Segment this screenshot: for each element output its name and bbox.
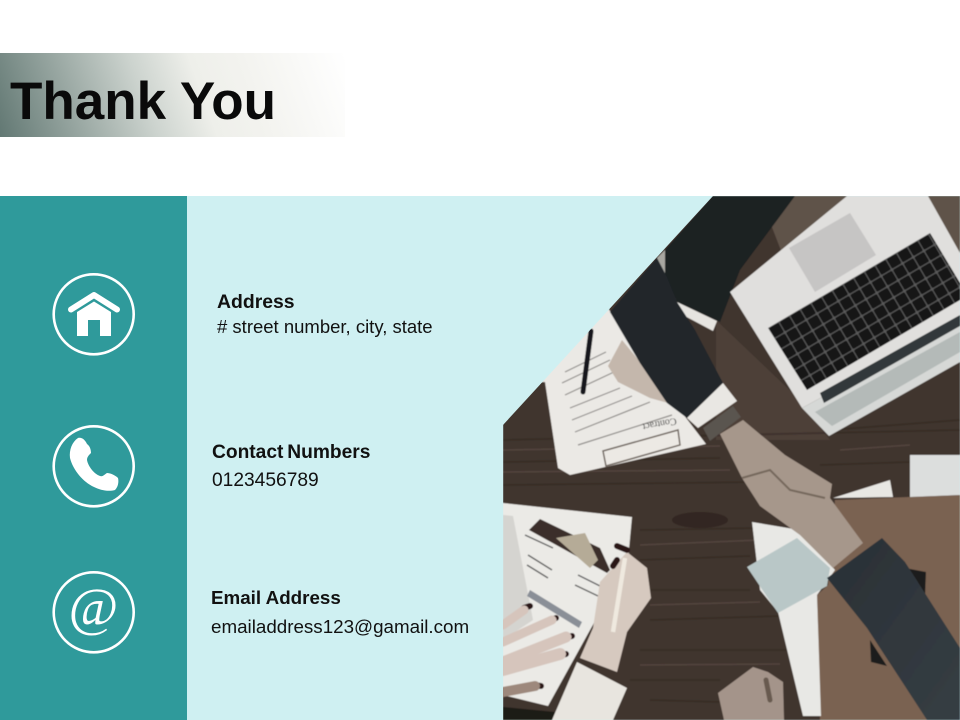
email value: emailaddress123@gamail.com (211, 616, 469, 637)
trackpad (789, 213, 876, 292)
writing hand (580, 552, 651, 672)
keyboard (768, 232, 960, 390)
grey note (747, 538, 830, 613)
grey shirt strip between sleeves (656, 250, 666, 274)
white blouse sleeve (552, 662, 627, 720)
pen (583, 331, 591, 392)
photo: business handshake over desk (503, 196, 960, 720)
address value: # street number, city, state (217, 316, 433, 337)
panel: light contact background (187, 196, 960, 720)
icon: phone (52, 425, 135, 508)
fist (718, 667, 784, 720)
text block: address (217, 291, 433, 337)
icon: at sign: @ (69, 577, 118, 637)
laptop (730, 196, 960, 436)
clipboard clip (529, 519, 610, 573)
contract paper on clipboard: Contract (641, 415, 677, 432)
lower suit sleeve (610, 258, 723, 418)
dark bottom corner (503, 707, 555, 720)
nail polish (524, 546, 627, 686)
contact value: 0123456789 (212, 470, 319, 491)
upper suit sleeve (665, 196, 795, 322)
icon: home (52, 273, 135, 356)
paper behind handshake (833, 480, 893, 498)
invoice sheets (503, 503, 632, 706)
contract paper on clipboard (538, 304, 706, 475)
wrist watch (703, 406, 741, 441)
upper shirt cuff (677, 302, 717, 331)
text block: contact numbers (212, 442, 370, 491)
desk surface (503, 196, 960, 720)
laptop hinge and screen edge (802, 322, 960, 436)
corner calendar paper (910, 455, 960, 497)
phone under sleeve (870, 568, 926, 666)
title: Thank You (10, 72, 276, 131)
panel: teal icon column (0, 196, 187, 720)
title banner (0, 53, 345, 137)
lower shirt cuff (687, 383, 737, 428)
icon: at sign (52, 571, 135, 654)
white paper stack (752, 522, 835, 716)
hand under sleeve (608, 340, 668, 403)
left hand fingers (503, 610, 566, 692)
clasped hands and forearm (720, 420, 863, 568)
address heading: Address (217, 291, 295, 313)
right suit sleeve (827, 538, 960, 720)
pencil (613, 558, 625, 632)
email heading: Email Address (211, 587, 341, 608)
contact heading: Contact Numbers (212, 442, 370, 463)
folder (817, 495, 960, 720)
text block: email address (211, 587, 469, 637)
